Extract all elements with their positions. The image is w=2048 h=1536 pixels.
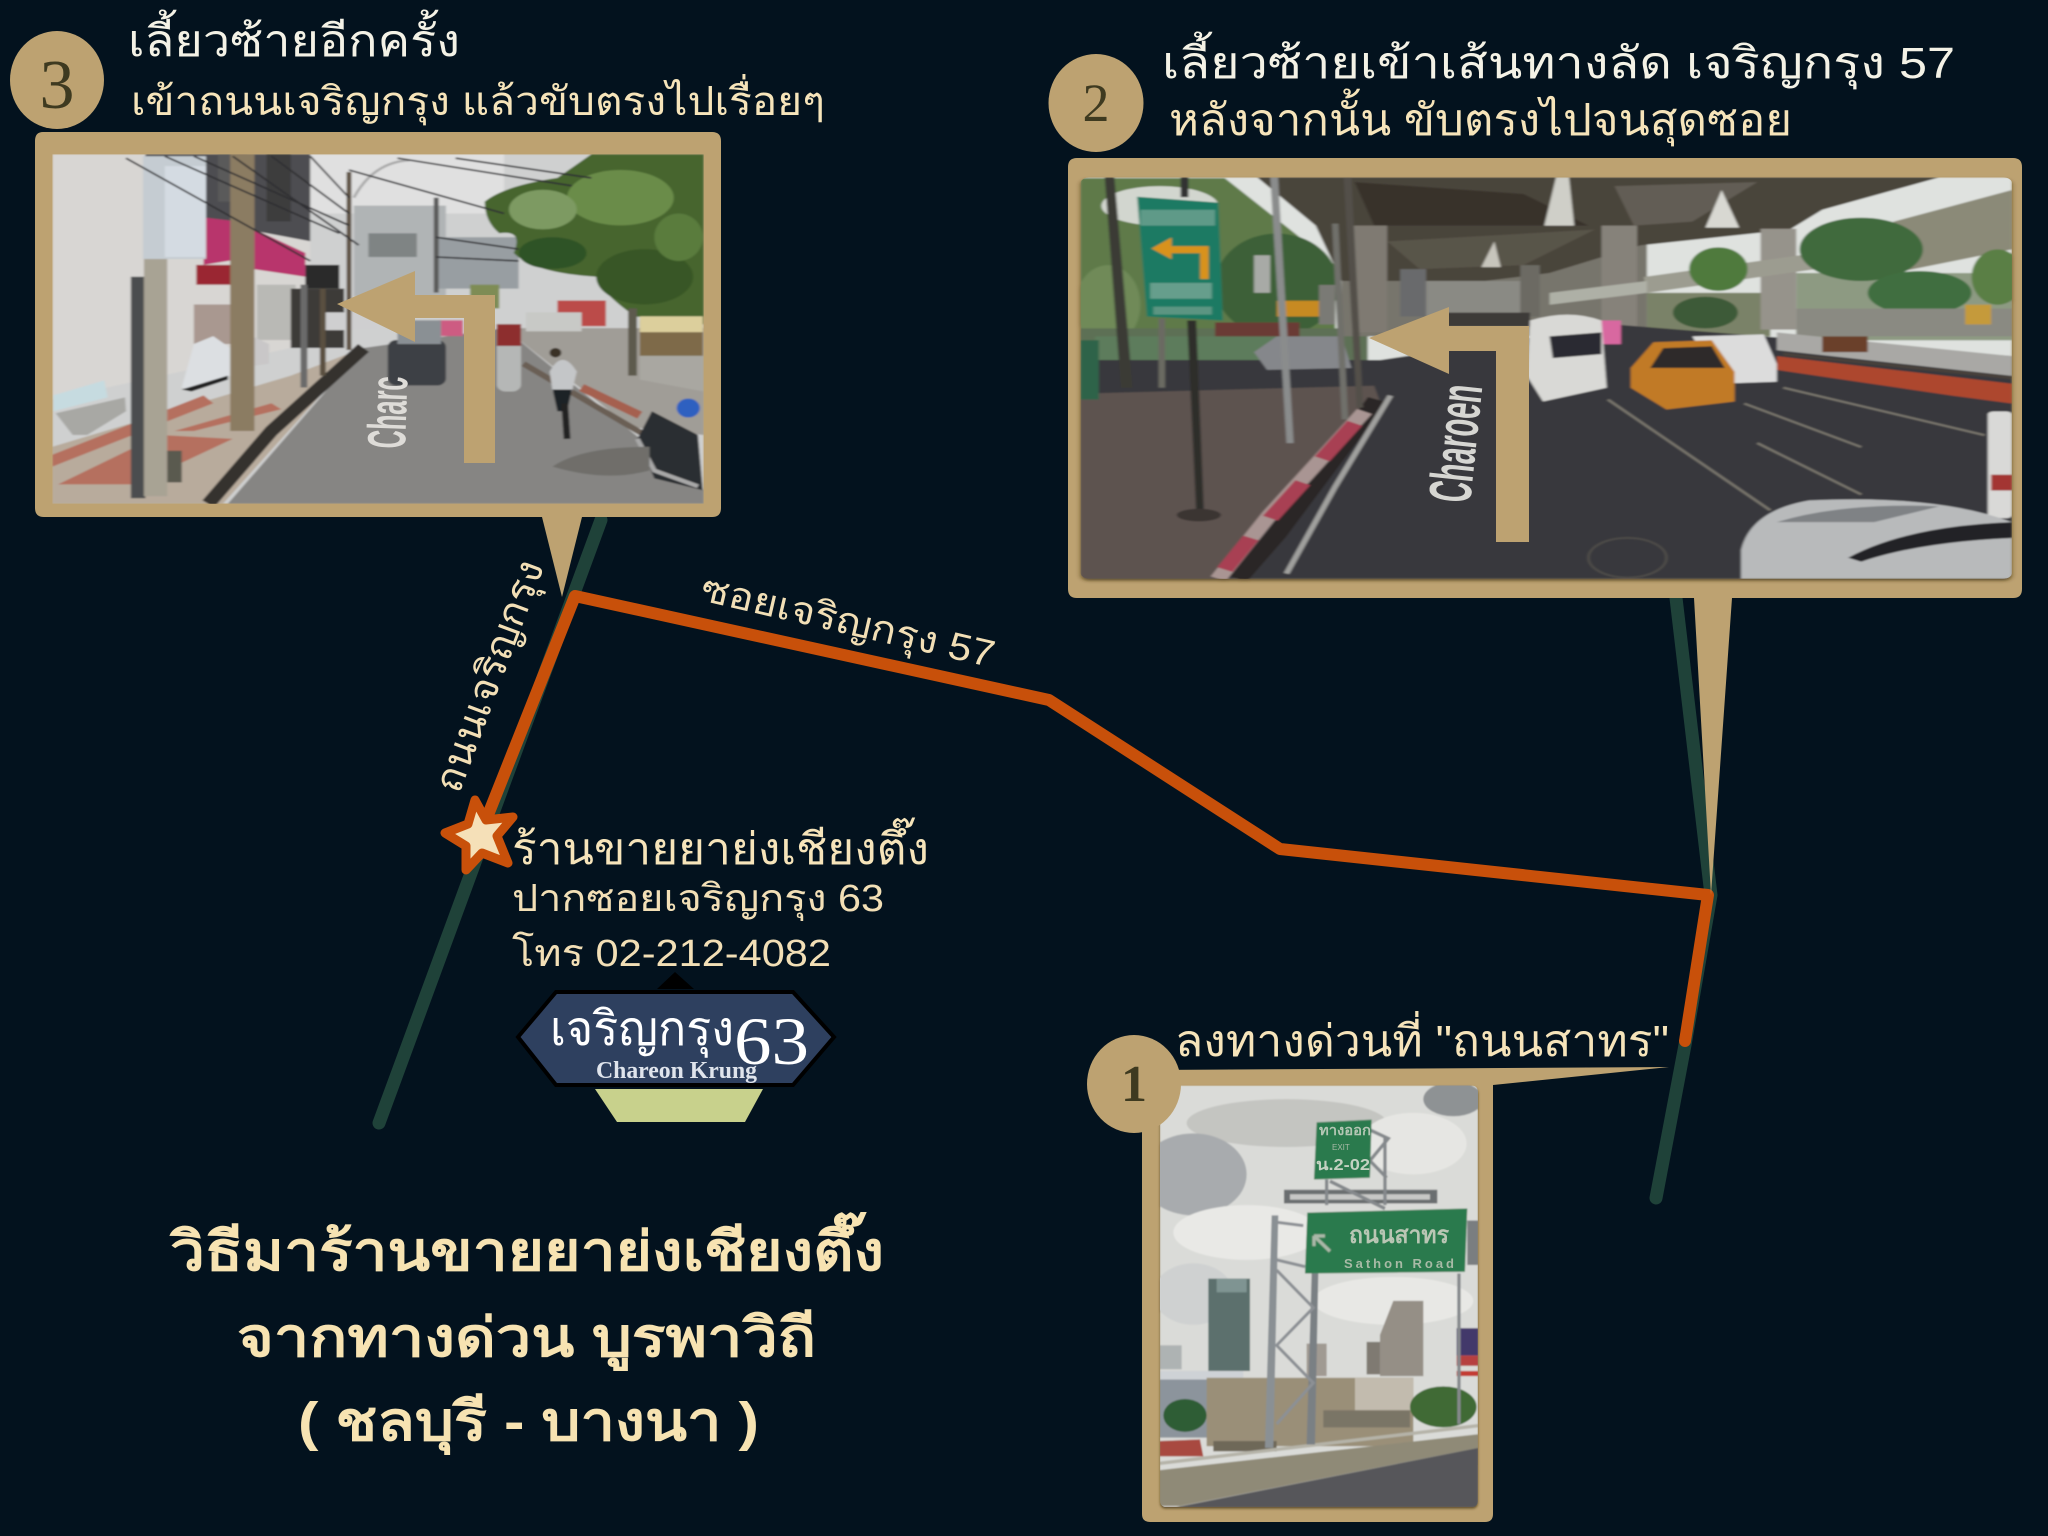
road sign: Chareon Krung 63: 63 [734, 1003, 809, 1079]
route line [480, 596, 1708, 1041]
sign text: Sathon Road [1316, 1122, 1454, 1271]
text: step 3 instructions [128, 9, 825, 126]
sign text: Sathon Road: ทางออก [1319, 1122, 1371, 1138]
text: step 3 instructions: เลี้ยวซ้ายอีกครั้ง [128, 9, 460, 66]
step badge 1 [1087, 1035, 1181, 1133]
road: expressway [1656, 598, 1711, 1198]
callout frame [35, 132, 721, 597]
step badge 2: 2 [1082, 73, 1110, 133]
text: step 2 instructions [1162, 31, 1955, 147]
text: step 1 instruction: ลงทางด่วนที่ "ถนนสาทร" [1175, 1010, 1669, 1066]
sign text: Sathon Road: ถนนสาทร [1349, 1222, 1449, 1249]
photo: Sathon Road exit sign [1140, 1082, 1483, 1507]
callout frame [1142, 1067, 1669, 1522]
step badge 3 [10, 31, 104, 129]
panel: step 1 photo [1140, 1067, 1669, 1522]
road sign: Chareon Krung 63 [518, 972, 834, 1122]
callout frame [1068, 158, 2022, 895]
road label: Soi 57: ซอยเจริญกรุง 57 [697, 568, 999, 677]
road sign: Chareon Krung 63: เจริญกรุง [550, 1003, 734, 1058]
road sign: Chareon Krung 63: Chareon Krung [596, 1058, 757, 1084]
road label: Charoen Krung: ถนนเจริญกรุง [426, 554, 555, 799]
title: ( ชลบุรี - บางนา ) [298, 1392, 759, 1456]
text: shop name and address [512, 817, 929, 975]
road map [379, 520, 1711, 1198]
panel: step 2 photo [1068, 158, 2024, 895]
title: จากทางด่วน บูรพาวิถี [237, 1308, 816, 1371]
title [169, 1211, 884, 1456]
text: step 2 instructions: หลังจากนั้น ขับตรงไปจนสุดซอย [1169, 88, 1792, 147]
photo: under the flyover with shortcut sign [1075, 177, 2024, 579]
road: Charoen Krung [379, 520, 601, 1123]
text: shop name and address: ร้านขายยาย่งเชียงตึ๊ง [512, 817, 929, 874]
title: วิธีมาร้านขายยาย่งเชียงตึ๊ง [169, 1211, 884, 1282]
sign text: Sathon Road: น.2-02 [1316, 1157, 1370, 1174]
text: shop name and address: โทร 02-212-4082 [512, 931, 831, 975]
arrow: turn left [337, 271, 495, 463]
sign text: Sathon Road: Sathon Road [1344, 1256, 1454, 1271]
photo: street with left turn [52, 154, 704, 504]
arrow: turn left [1369, 307, 1529, 542]
panel: step 3 photo: Charc [357, 375, 420, 449]
icon: destination star [445, 800, 513, 870]
text: step 2 instructions: เลี้ยวซ้ายเข้าเส้นทางลัด เจริญกรุง 57 [1162, 31, 1955, 90]
step badge 1: 1 [1121, 1056, 1147, 1113]
step badge 2 [1048, 54, 1144, 152]
text: shop name and address: ปากซอยเจริญกรุง 63 [512, 878, 884, 921]
text: step 3 instructions: เข้าถนนเจริญกรุง แล้วขับตรงไปเรื่อยๆ [131, 74, 825, 126]
step badge 3: 3 [40, 47, 74, 124]
panel: step 2 photo: Charoen [1416, 381, 1495, 505]
sign text: Sathon Road: EXIT [1332, 1143, 1350, 1152]
panel: step 3 photo [35, 132, 721, 597]
